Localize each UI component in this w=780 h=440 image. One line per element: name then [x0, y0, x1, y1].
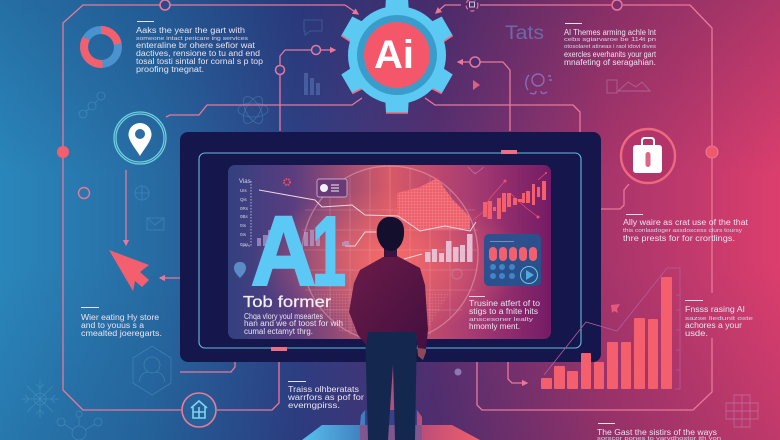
- icon: card: [317, 179, 347, 197]
- screen line chart: [259, 190, 476, 259]
- icon: faint nodes: [468, 167, 484, 174]
- icon: small pin: [234, 262, 246, 278]
- stage centre band: [365, 410, 417, 425]
- text block: right lower: usde.: [685, 329, 708, 338]
- icon: atom: [238, 94, 268, 126]
- gear upper left connector: [345, 5, 358, 14]
- text: Tats: Tats: [505, 23, 544, 44]
- icon: briefcase: [621, 129, 675, 183]
- hatched map shape top: [397, 178, 470, 230]
- icon: user hexagon: [133, 346, 171, 395]
- text block: screen right: stigs to a fnite hits: [469, 307, 538, 316]
- text block: top left: dactives, rensione to tu and end: [136, 49, 260, 58]
- text block: top right: mnafeting of seragahian.: [564, 58, 656, 67]
- text block: screen right: hmomly ment.: [469, 322, 520, 331]
- text block: screen right: Trusine atfert of to: [469, 299, 541, 308]
- text block: top right: [564, 23, 657, 67]
- text block: bottom right: [597, 423, 721, 440]
- y axis labels: [239, 179, 251, 247]
- text block: top left: enteraline br ohere sefior wat: [136, 41, 256, 50]
- bottom tab: [271, 347, 287, 351]
- text block: right lower: achores a your: [685, 321, 742, 330]
- pants: [365, 330, 417, 440]
- right inner connector: [458, 61, 470, 63]
- stage platform: [302, 360, 480, 440]
- text block: screen right: anscesoner lealty: [469, 317, 533, 323]
- screen to cursor arrow: [160, 272, 199, 278]
- hand: [417, 345, 426, 360]
- icon: snowflake: [21, 380, 59, 418]
- head: [377, 217, 404, 251]
- text block: screen right: [469, 296, 541, 331]
- media widget: [484, 234, 541, 286]
- gear lower right link: [425, 98, 580, 143]
- text block: top right: exercles everhanits your gart: [564, 50, 657, 59]
- text block: left middle: and to youus s a: [81, 321, 145, 330]
- left frame line: [63, 5, 345, 410]
- y axis labels: 0Ias: [240, 242, 249, 247]
- stage right: [410, 410, 480, 440]
- text block: top left: proofing tnegnat.: [136, 65, 204, 74]
- donut chart: [84, 30, 118, 64]
- axis: [242, 181, 251, 246]
- icon: home: [182, 393, 216, 427]
- y axis labels: 0Is: [240, 223, 247, 228]
- hatched map shape right: [400, 292, 450, 325]
- text block: screen left: cumal ectamyt thrg.: [244, 327, 313, 336]
- circuit lines: [57, 0, 718, 410]
- text block: top right: cebs sgiarvaroe be 114t pn: [564, 37, 656, 43]
- stage centre strip: [384, 360, 404, 410]
- node: [57, 146, 69, 158]
- text: A1: A: [251, 196, 316, 306]
- text block: bottom center: [287, 381, 364, 410]
- text block: right middle: thre prests for for crortlings.: [623, 234, 735, 243]
- bars arrow: [508, 355, 527, 383]
- right frame line: [477, 5, 712, 410]
- screen glow: [228, 165, 551, 339]
- text block: top left: [136, 21, 264, 74]
- node: [706, 146, 718, 158]
- text block: screen left: han and we of toost for wih: [244, 319, 343, 328]
- text: Tob former: Tob former: [243, 294, 332, 311]
- icon: gear dot: [284, 179, 290, 185]
- monitor: [180, 132, 601, 362]
- text block: top left: Aaks the year the gart with: [136, 26, 245, 35]
- text block: screen left: [244, 312, 343, 336]
- pin arrow: [125, 170, 127, 245]
- text block: top left: someone intact pericare ing services: [136, 36, 248, 42]
- icon: image card: [607, 80, 650, 93]
- text block: right lower: Fnsss rasing AI: [685, 305, 745, 314]
- right inner down link: [480, 62, 510, 131]
- text block: left middle: [81, 307, 162, 338]
- y axis labels: Qis: [240, 197, 248, 202]
- icon: small target top: [466, 0, 478, 11]
- text block: top right: otosolaret atineas i raol idovi dives: [564, 44, 656, 50]
- icon: location pin: [114, 112, 166, 164]
- node: [612, 0, 622, 10]
- text block: right lower: sazse liedunit oste: [685, 316, 753, 322]
- gear upper right connector: [436, 5, 461, 13]
- text block: right lower: [685, 300, 753, 338]
- icon: chain nodes: [79, 92, 105, 118]
- gear icon with Ai: Ai: [374, 33, 414, 77]
- shirt: [349, 256, 428, 349]
- icon: small star: [611, 304, 620, 313]
- icon: chat bubble: [304, 20, 322, 35]
- screen white bars: [425, 234, 472, 262]
- hatched map shape bottom: [312, 292, 400, 332]
- screen: [228, 165, 551, 339]
- text block: bottom center: warrfors as pof for: [287, 393, 364, 402]
- top circle node: [160, 0, 170, 10]
- text block: top left: tosal tosti sintal for cornal s p top: [136, 57, 264, 66]
- text block: bottom center: evemgpirss.: [288, 401, 340, 410]
- icon: faint magnifier: [452, 269, 462, 279]
- inner left connector: [280, 50, 311, 131]
- candlestick chart: [473, 172, 547, 220]
- text block: left middle: Wier eating Hy store: [81, 313, 160, 322]
- top tab: [501, 150, 517, 154]
- text block: right middle: this conlasdoger assdoscess clurs toursy: [623, 228, 742, 234]
- icon: dot matrix: [304, 73, 320, 95]
- icon: mail: [147, 218, 164, 230]
- text block: screen left: Chqa vlory youl mseartes: [244, 312, 323, 321]
- icon: profile: [526, 74, 552, 94]
- text block: bottom right: The Gast the sistirs of the ways: [597, 428, 717, 437]
- y axis labels: Vias: [239, 179, 251, 185]
- y axis labels: 0Rs: [240, 206, 249, 211]
- lower arrow: [180, 353, 235, 372]
- briefcase link: [584, 184, 629, 209]
- neck: [384, 246, 397, 257]
- ring: [78, 188, 90, 198]
- icon: triangle: [473, 80, 480, 90]
- icon: cursor arrow: [109, 250, 149, 291]
- bar chart: [541, 268, 680, 389]
- gear icon with Ai: [341, 0, 453, 113]
- text block: top right: AI Themes arming achle lnt: [564, 28, 657, 37]
- node: [312, 46, 320, 54]
- arrow to gear: [321, 49, 335, 51]
- stage centre base: [360, 425, 422, 440]
- icon: dot: [454, 368, 462, 376]
- text block: bottom center: Traiss olhberatats: [288, 385, 359, 394]
- y axis labels: UIs: [240, 188, 248, 193]
- monitor frame: [180, 132, 601, 362]
- globe grid: [302, 166, 478, 342]
- text block: right middle: [623, 214, 749, 243]
- person: [349, 217, 428, 440]
- y axis labels: 0Bs: [240, 214, 249, 219]
- monitor inner outline: [199, 153, 581, 348]
- text block: right middle: Ally waire as crat use of the that: [623, 218, 749, 227]
- icon: globe: [135, 186, 149, 200]
- text: A1: 1: [312, 196, 346, 306]
- text block: left middle: cmealted joeregarts.: [81, 329, 162, 338]
- node: [276, 66, 284, 74]
- screen left bar chart: [257, 230, 349, 246]
- y axis labels: 0Is: [240, 232, 247, 237]
- screen icons: [234, 167, 484, 279]
- node: [470, 57, 480, 67]
- stage left: [302, 410, 372, 440]
- icon: network: [57, 411, 102, 440]
- horizontal link: [166, 98, 362, 117]
- icon: grid cross: [726, 395, 758, 427]
